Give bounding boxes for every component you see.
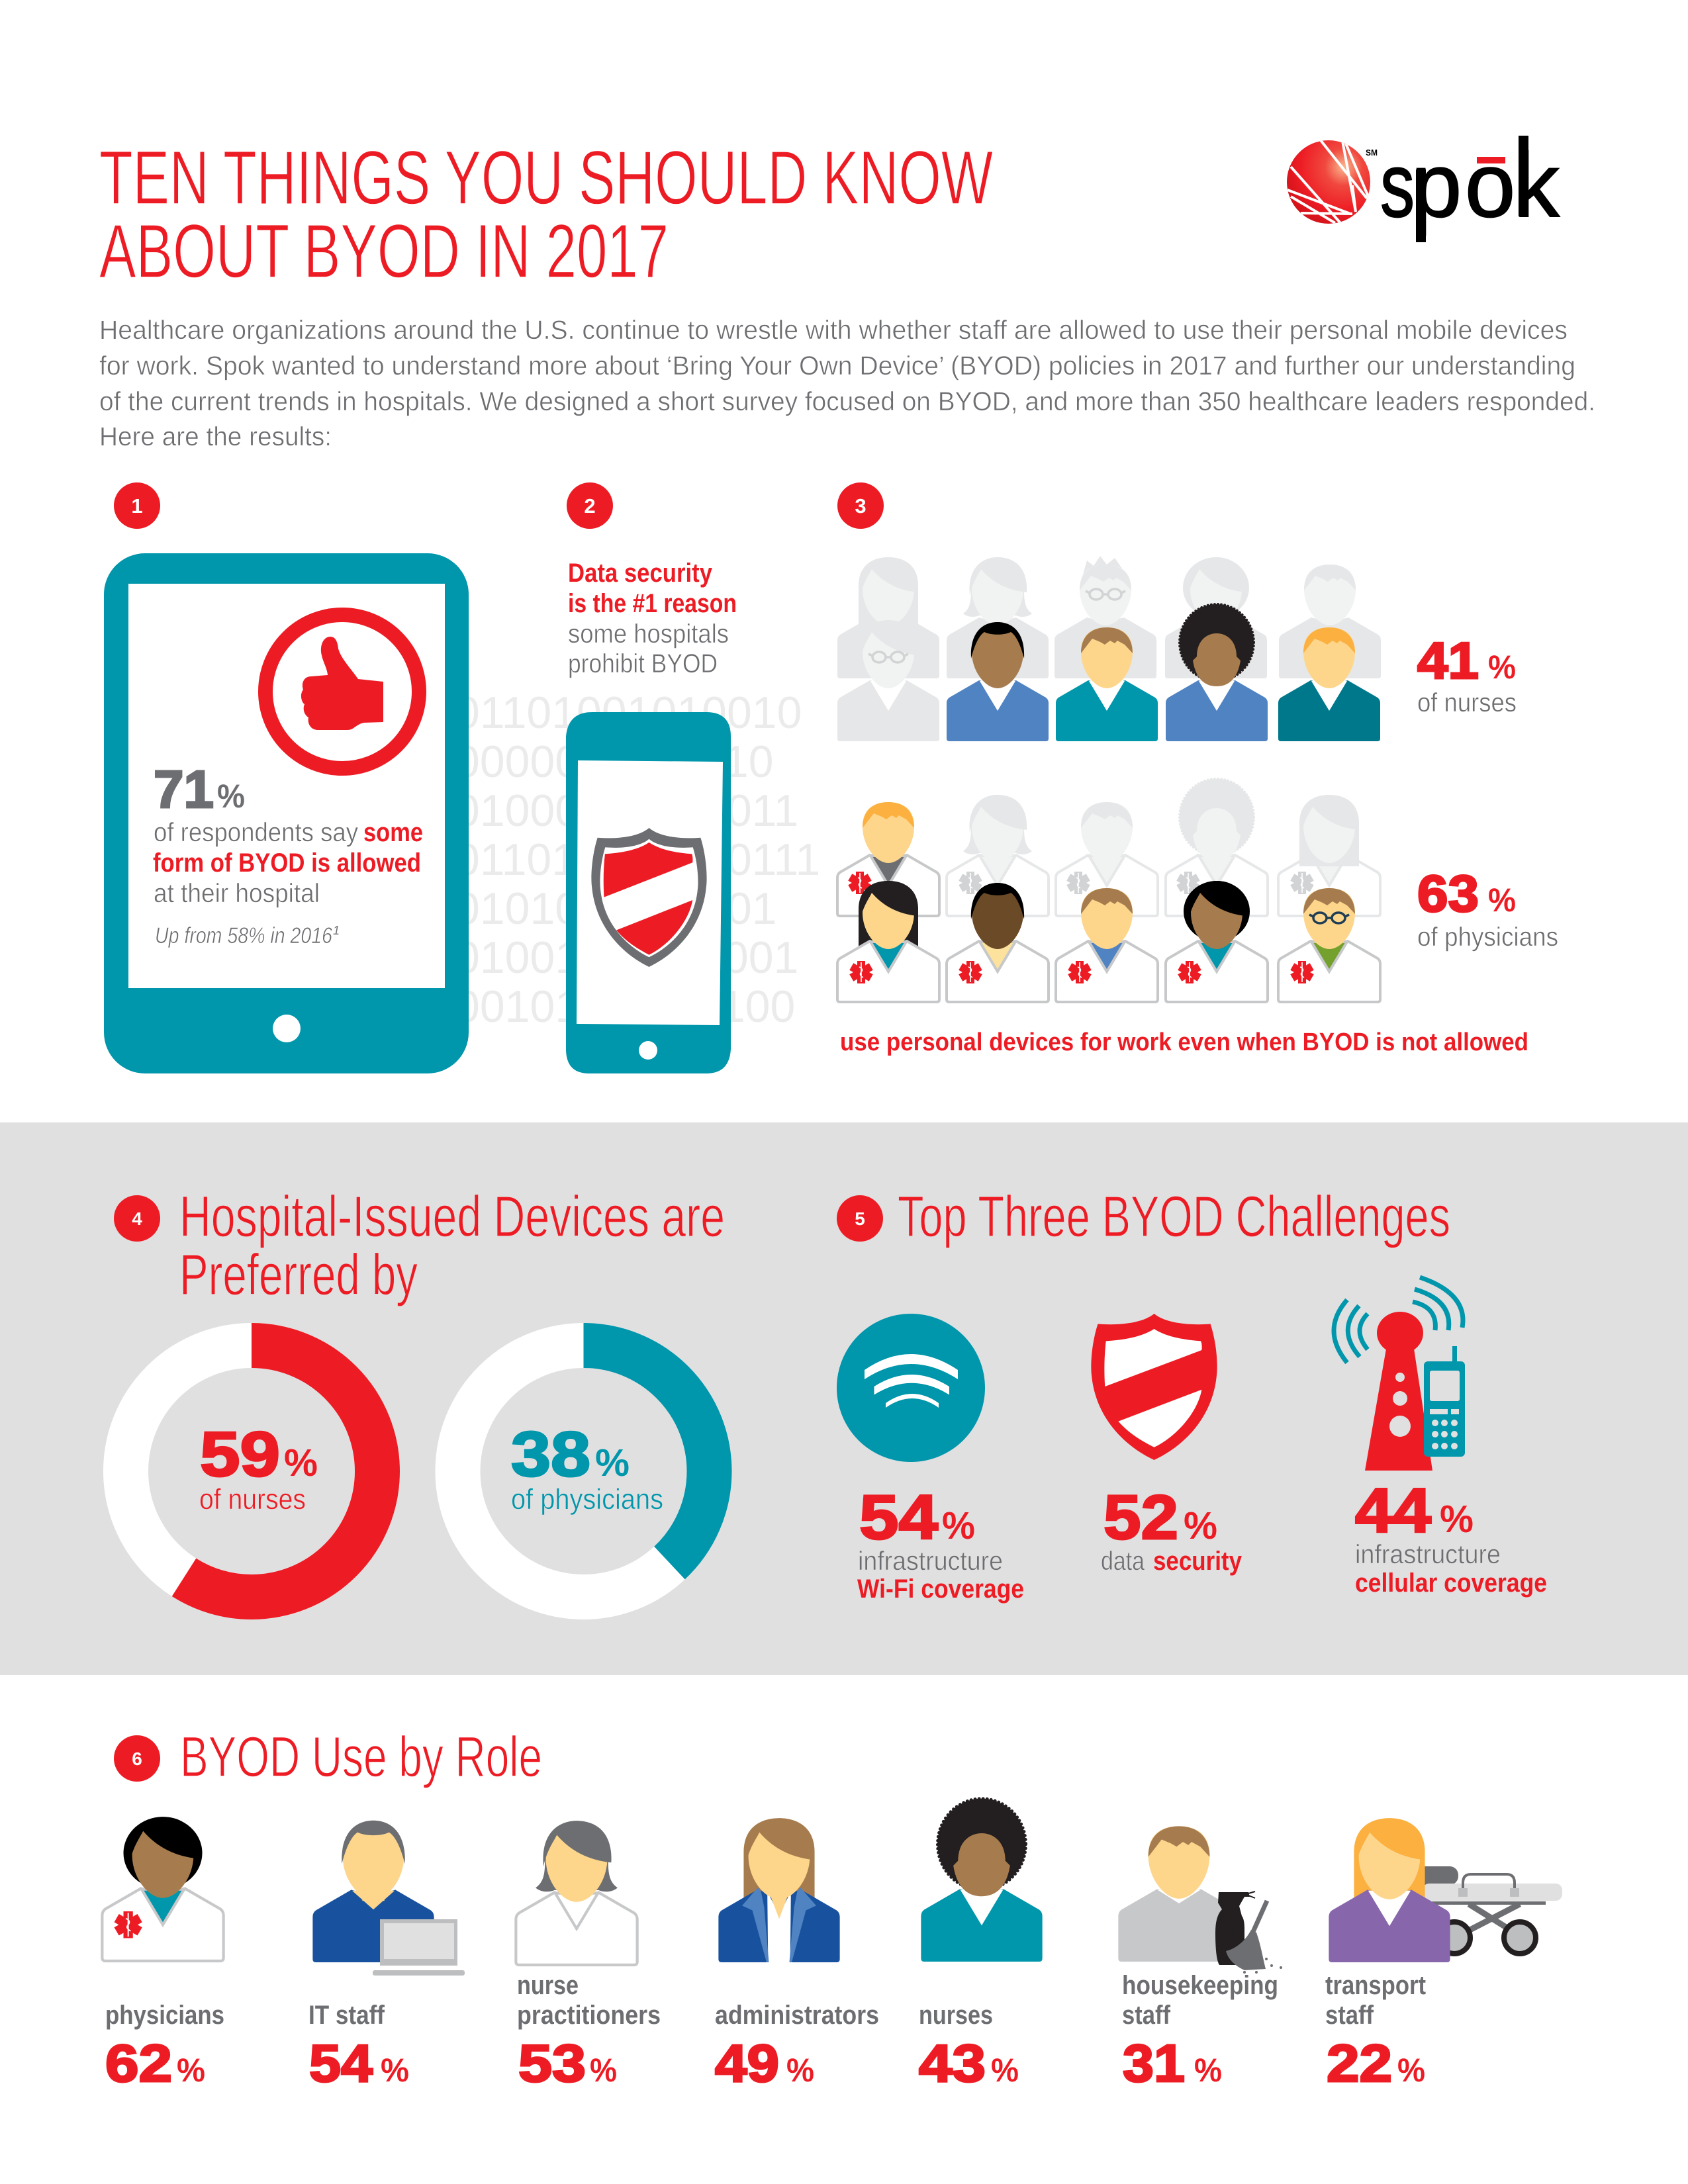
role: housekeeping staff: % — [1194, 2052, 1222, 2089]
donut chart: 38% of physicians: % — [595, 1441, 630, 1484]
role: nurse practitioners — [516, 1821, 661, 2093]
badge 3: 3 — [855, 494, 867, 518]
role: nurses: nurses — [919, 2001, 993, 2030]
logo: spok: s — [1380, 135, 1415, 236]
role: IT staff: % — [381, 2052, 409, 2089]
stat: 63% of physicians: % — [1488, 882, 1516, 919]
text: data security reason: is the #1 reason — [568, 589, 737, 618]
donut chart: 59% of nurses: 59 — [200, 1419, 280, 1490]
stat: 44% cellular — [1355, 1476, 1547, 1598]
role: nurse practitioners: practitioners — [517, 2001, 661, 2030]
panel: top three challenges — [837, 1185, 1547, 1604]
donut chart: 38% of physicians — [458, 1345, 710, 1597]
stat: 54% wifi: 54 — [859, 1482, 938, 1553]
binary background pattern: 01000110101011 — [455, 786, 798, 836]
physicians front row — [837, 881, 1380, 1002]
stat: 44% cellular: 44 — [1355, 1476, 1431, 1546]
donut chart: 59% of nurses: of nurses — [199, 1483, 306, 1516]
role: physicians — [102, 1817, 224, 2093]
title: TEN THINGS YOU SHOULD KNOW — [99, 136, 993, 220]
role: IT staff — [308, 1821, 465, 2093]
badge 2: 2 — [584, 494, 596, 518]
stat text: some — [363, 818, 423, 847]
role: nurses — [919, 1799, 1043, 2093]
binary background pattern: 01001101011001 — [455, 933, 798, 983]
title: ABOUT BYOD IN 2017 — [99, 209, 669, 294]
donut chart: 59% of nurses: % — [284, 1441, 318, 1484]
badge 6 — [114, 1735, 160, 1782]
intro paragraph: Healthcare organizations around the U.S. continue to wrestle with whether staff are allowed to use their personal mobile devices — [99, 316, 1568, 345]
stat text: Up from 58% in 2016 — [155, 923, 332, 948]
badge 4 — [114, 1195, 160, 1242]
stat: 52% data security — [1101, 1482, 1243, 1576]
role: housekeeping staff: staff — [1122, 2001, 1171, 2030]
icon: tablet — [104, 553, 469, 1073]
stat: 41% of nurses — [1417, 631, 1517, 717]
icon: phone — [566, 712, 731, 1073]
heading 5: Top Three BYOD Challenges — [898, 1185, 1450, 1249]
role: administrators — [715, 1818, 879, 2093]
heading 4: Preferred by — [179, 1243, 418, 1307]
badge 4: 4 — [132, 1208, 142, 1229]
role: physicians: physicians — [105, 2001, 224, 2030]
stat: 44% cellular: % — [1440, 1498, 1474, 1541]
nurses front row — [837, 604, 1380, 741]
panel: BYOD use by role — [102, 1725, 1562, 2093]
caption: personal devices: use personal devices for work even when BYOD is not allowed — [840, 1028, 1528, 1056]
heading 6: BYOD Use by Role — [180, 1725, 542, 1789]
role: transport staff — [1325, 1818, 1562, 2093]
stat: 52% data security: % — [1184, 1504, 1217, 1547]
logo: spok — [1287, 135, 1560, 242]
binary background pattern: 0000011010110 — [455, 737, 774, 787]
icon: shield — [591, 828, 707, 967]
panel: nurses using personal devices — [837, 556, 1517, 741]
role: IT staff: 54 — [309, 2034, 373, 2093]
stat text: % — [217, 778, 245, 815]
badge 3 — [837, 482, 884, 529]
role: physicians: % — [177, 2052, 205, 2089]
panel: tablet stat 71% — [104, 553, 469, 1073]
role: nurses: 43 — [919, 2034, 986, 2093]
badge 5 — [837, 1195, 883, 1242]
stat: 52% data security: security — [1153, 1547, 1243, 1576]
role: nurse practitioners: % — [590, 2052, 617, 2089]
stat: 41% of nurses: % — [1488, 649, 1516, 686]
stat: 41% of nurses: of nurses — [1417, 688, 1517, 717]
role: administrators: administrators — [715, 2001, 879, 2030]
binary background pattern: 0101011010101 — [455, 884, 777, 934]
logo: spok: pok — [1411, 135, 1560, 236]
stat text: of respondents say — [154, 818, 358, 847]
role: housekeeping staff: 31 — [1123, 2034, 1185, 2093]
binary background pattern — [455, 688, 820, 1032]
stat: 44% cellular: infrastructure — [1355, 1540, 1501, 1569]
intro paragraph — [99, 316, 1595, 451]
heading 4 — [179, 1185, 725, 1307]
text: data security reason: Data security — [568, 559, 713, 588]
role: transport staff: transport — [1325, 1971, 1426, 2000]
stat: 54% wifi: Wi-Fi coverage — [857, 1574, 1024, 1604]
role: IT staff: IT staff — [308, 2001, 385, 2030]
panel: data security — [566, 559, 737, 1073]
ghost nurses back row — [837, 556, 1381, 678]
stat: 54% wifi — [857, 1482, 1024, 1604]
stat: 44% cellular: cellular coverage — [1355, 1569, 1547, 1598]
physicians back row — [837, 779, 1380, 916]
icon: wifi — [837, 1314, 985, 1462]
badge 1: 1 — [131, 494, 143, 518]
stat: 52% data security: data — [1101, 1547, 1145, 1576]
role: nurses: % — [991, 2052, 1019, 2089]
panel: physicians using personal devices — [837, 779, 1558, 1056]
stat text: 1 — [333, 924, 340, 937]
role: nurse practitioners: 53 — [518, 2034, 586, 2093]
icon: shield — [1091, 1314, 1217, 1460]
role: housekeeping staff — [1118, 1826, 1282, 2093]
text: data security reason — [568, 559, 737, 678]
stat text: 71 — [154, 760, 214, 819]
text: data security reason: some hospitals — [568, 619, 729, 649]
badge 2 — [567, 482, 613, 529]
binary background pattern: 01101001010010 — [455, 688, 802, 738]
role: housekeeping staff: housekeeping — [1122, 1971, 1278, 2000]
badge 1 — [114, 482, 160, 529]
binary background pattern: 011010101010111 — [455, 835, 820, 885]
title — [99, 136, 993, 294]
role: transport staff: staff — [1325, 2001, 1374, 2030]
intro paragraph: of the current trends in hospitals. We designed a short survey focused on BYOD, and more than 350 healthcare leaders responded. — [99, 387, 1595, 416]
role: transport staff: 22 — [1327, 2034, 1392, 2093]
stat text: form of BYOD is allowed — [153, 848, 421, 878]
stat: 41% of nurses: 41 — [1417, 631, 1479, 690]
stat text: at their hospital — [154, 879, 320, 908]
donut chart: 38% of physicians: 38 — [511, 1419, 590, 1490]
donut chart: 59% of nurses — [126, 1345, 377, 1597]
logo: spok: SM — [1366, 148, 1378, 158]
intro paragraph: for work. Spok wanted to understand more about ‘Bring Your Own Device’ (BYOD) policies in 2017 and further our understanding — [99, 351, 1575, 381]
role: administrators: % — [786, 2052, 814, 2089]
stat: 54% wifi: % — [942, 1504, 975, 1547]
role: physicians: 62 — [105, 2034, 172, 2093]
donut chart: 38% of physicians: of physicians — [511, 1483, 663, 1516]
grey band — [0, 1122, 1688, 1675]
text: data security reason: prohibit BYOD — [568, 649, 718, 678]
stat: 63% of physicians: of physicians — [1417, 923, 1558, 952]
badge 6: 6 — [132, 1749, 142, 1769]
badge 5: 5 — [855, 1208, 865, 1229]
stat: 54% wifi: infrastructure — [858, 1547, 1003, 1576]
binary background pattern: 00101101101100 — [455, 981, 795, 1032]
stat: 52% data security: 52 — [1103, 1482, 1178, 1553]
stat: 63% of physicians — [1417, 864, 1558, 952]
icon: thumbs up — [265, 615, 419, 768]
panel: hospital-issued devices — [114, 1185, 725, 1597]
role: administrators: 49 — [715, 2034, 779, 2093]
role: transport staff: % — [1397, 2052, 1425, 2089]
icon: cell tower and phone — [1334, 1277, 1465, 1471]
stat text — [153, 760, 423, 948]
role: nurse practitioners: nurse — [517, 1971, 579, 2000]
heading 4: Hospital-Issued Devices are — [179, 1185, 725, 1249]
intro paragraph: Here are the results: — [99, 422, 332, 451]
stat: 63% of physicians: 63 — [1417, 864, 1479, 923]
